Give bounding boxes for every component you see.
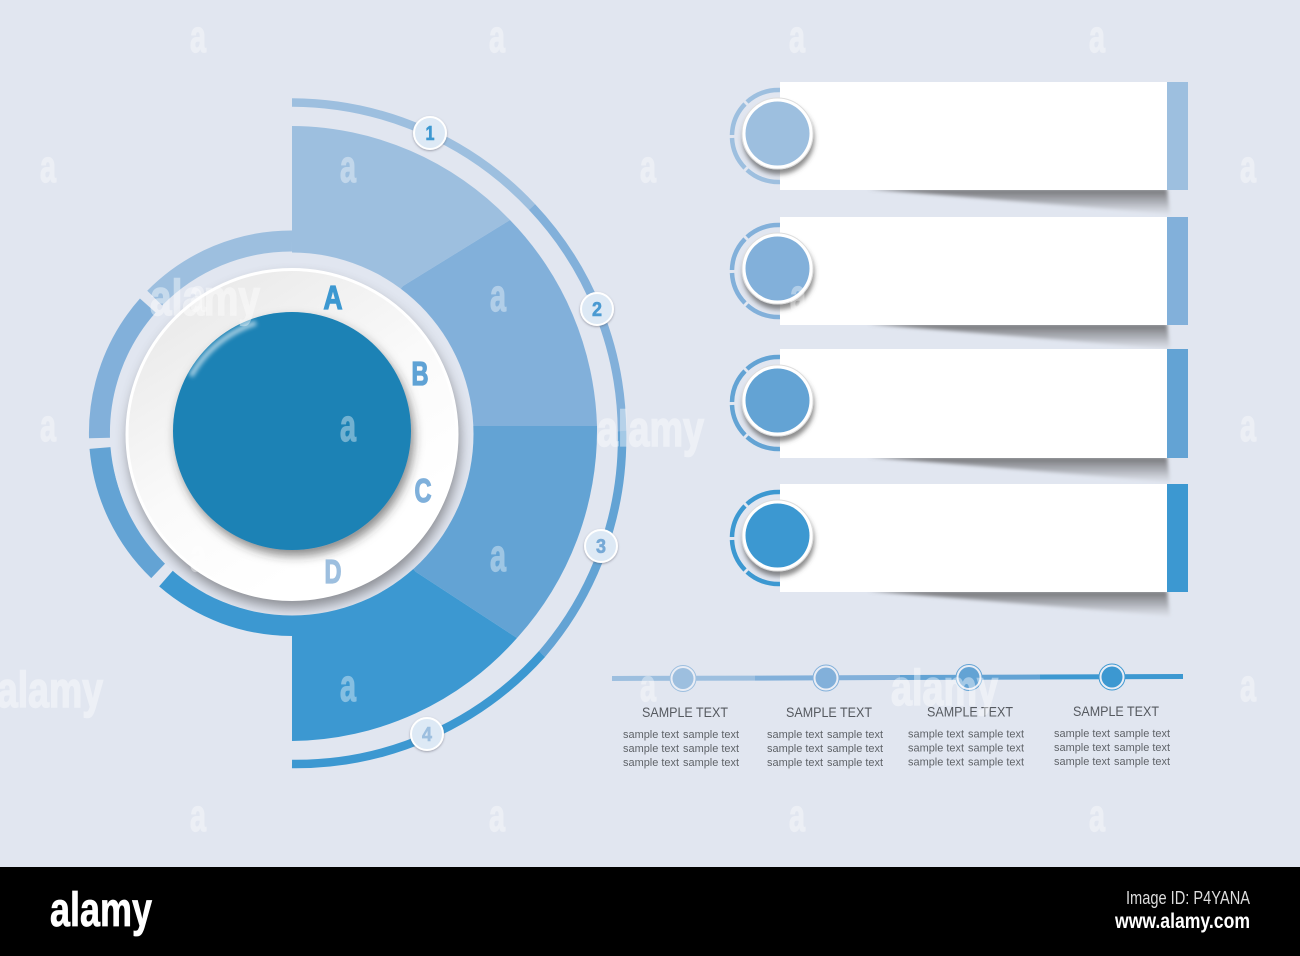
image id: Image ID: P4YANA	[1126, 888, 1250, 908]
card shadow	[868, 591, 1170, 616]
letters A-D: C	[414, 472, 432, 509]
letters A-D	[324, 279, 432, 590]
number badge 2	[581, 293, 613, 325]
watermarks: a	[340, 400, 357, 451]
watermarks: a	[1090, 530, 1107, 581]
text block 3: sample text	[908, 728, 964, 740]
watermarks: a	[790, 270, 807, 321]
watermarks: alamy	[0, 662, 103, 718]
gloss highlight	[191, 323, 256, 376]
number badge 1	[414, 117, 446, 149]
watermarks: a	[1089, 790, 1106, 841]
text block 2: sample text	[827, 757, 883, 769]
text block 4: sample text	[1054, 742, 1110, 754]
panel: card 4	[732, 484, 1188, 616]
text block 1: sample text	[683, 757, 739, 769]
watermarks: a	[340, 660, 357, 711]
text block 4: sample text	[1054, 756, 1110, 768]
watermarks: alamy	[150, 270, 260, 326]
text block 4: sample text	[1054, 728, 1110, 740]
watermarks: alamy	[891, 660, 998, 716]
segment 4	[292, 433, 517, 741]
text block 4: sample text	[1114, 742, 1170, 754]
watermarks: a	[190, 530, 207, 581]
number badge 3: 3	[596, 536, 606, 558]
marker 4	[1099, 664, 1125, 690]
number badge 3	[585, 530, 617, 562]
watermarks: a	[640, 660, 657, 711]
text block 3	[908, 704, 1024, 768]
segment 1	[292, 126, 510, 433]
text block 1: sample text	[623, 743, 679, 755]
segment 2	[292, 220, 597, 426]
watermarks: a	[340, 141, 357, 192]
icon arcs	[732, 357, 780, 449]
text block 2: sample text	[827, 743, 883, 755]
text block 2: SAMPLE TEXT	[786, 704, 872, 720]
text block 3: sample text	[968, 728, 1024, 740]
watermarks: alamy	[597, 401, 704, 457]
text block 2: sample text	[767, 729, 823, 741]
watermarks: a	[1240, 400, 1257, 451]
text block 3: SAMPLE TEXT	[927, 704, 1013, 720]
watermarks: a	[490, 530, 507, 581]
text block 1: sample text	[623, 729, 679, 741]
text block 1: sample text	[683, 743, 739, 755]
text block 4: sample text	[1114, 756, 1170, 768]
watermarks: a	[40, 400, 57, 451]
watermarks: a	[190, 790, 207, 841]
timeline	[612, 664, 1183, 692]
centre circle	[173, 312, 411, 550]
text block 3: sample text	[908, 756, 964, 768]
panel: card 2	[732, 217, 1188, 349]
letters A-D: A	[324, 279, 342, 316]
watermarks: a	[1089, 11, 1106, 62]
panel: card 3	[732, 349, 1188, 482]
watermarks: a	[190, 270, 207, 321]
card shadow	[868, 457, 1170, 482]
panel: card 1	[732, 82, 1188, 214]
watermarks: a	[640, 141, 657, 192]
text block 1: sample text	[623, 757, 679, 769]
number badge 4	[411, 718, 443, 750]
number badge 1: 1	[426, 123, 434, 145]
text block 1: sample text	[683, 729, 739, 741]
left inner ring	[99, 241, 292, 625]
text block 2: sample text	[767, 743, 823, 755]
marker 3	[956, 664, 982, 690]
text block 3: sample text	[908, 742, 964, 754]
text block 2	[767, 704, 883, 769]
light band around disc	[110, 252, 474, 616]
watermarks: a	[190, 11, 207, 62]
marker 1	[670, 666, 696, 692]
watermarks: a	[1240, 141, 1257, 192]
text block 4: SAMPLE TEXT	[1073, 703, 1159, 719]
watermarks: a	[1090, 270, 1107, 321]
text block 4	[1054, 703, 1170, 768]
icon arcs	[732, 492, 780, 584]
text block 3: sample text	[968, 742, 1024, 754]
outer thin ring	[292, 102, 622, 764]
watermarks: a	[489, 11, 506, 62]
text block 4: sample text	[1114, 728, 1170, 740]
line segments	[612, 676, 755, 681]
icon arcs	[732, 90, 780, 182]
number badge 2: 2	[592, 299, 602, 321]
number badge 4: 4	[422, 724, 433, 746]
card shadow	[868, 324, 1170, 349]
card shadow	[868, 189, 1170, 214]
watermarks: a	[1240, 660, 1257, 711]
watermarks: a	[40, 141, 57, 192]
website: www.alamy.com	[1114, 910, 1250, 933]
text block 2: sample text	[767, 757, 823, 769]
watermarks: a	[789, 11, 806, 62]
fan chart with four segments	[292, 126, 597, 741]
watermarks: a	[490, 270, 507, 321]
watermarks: a	[489, 790, 506, 841]
segment 3	[292, 426, 597, 638]
icon arcs	[732, 225, 780, 317]
footer logo: alamy	[50, 884, 152, 937]
watermarks: a	[789, 790, 806, 841]
white disc	[127, 270, 457, 600]
text block 1: SAMPLE TEXT	[642, 704, 728, 720]
text block 2: sample text	[827, 729, 883, 741]
marker 2	[813, 665, 839, 691]
text block 1	[623, 704, 739, 769]
footer bar	[0, 867, 1300, 956]
letters A-D: D	[324, 553, 342, 590]
text block 3: sample text	[968, 756, 1024, 768]
letters A-D: B	[412, 355, 428, 392]
